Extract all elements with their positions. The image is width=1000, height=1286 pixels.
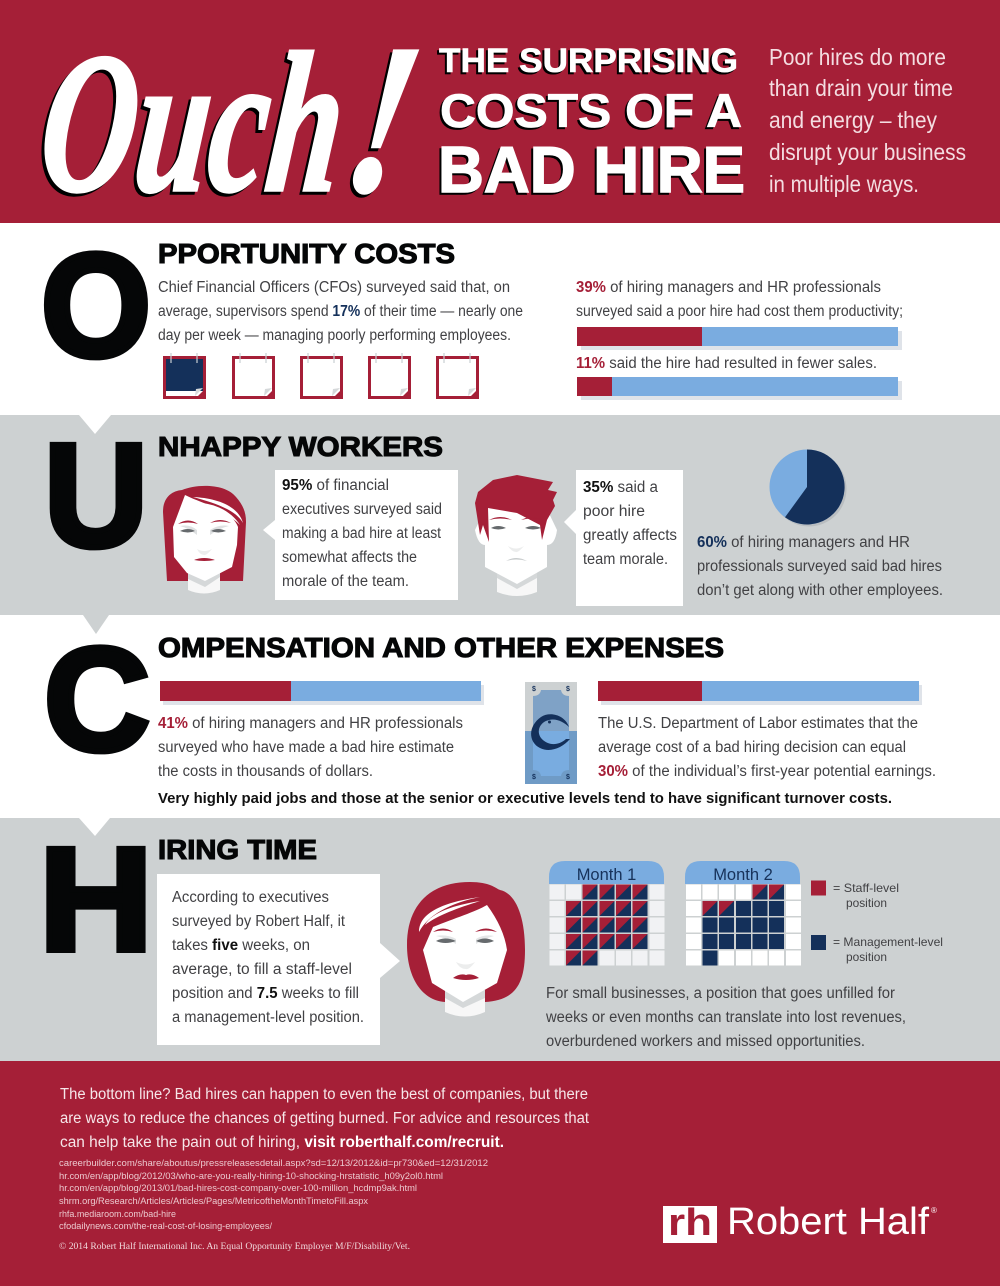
big letter U: U	[44, 414, 148, 578]
callout: weeks to fill: position and 7.5 weeks to fill	[172, 985, 359, 1002]
bar: 30 percent	[598, 681, 922, 705]
text: 41 percent: the costs in thousands of dollars.	[158, 763, 373, 780]
icon: burned dollar bill	[525, 682, 577, 784]
icon: woman face	[163, 486, 246, 594]
callout: 95 percent: morale of the team.	[282, 573, 409, 590]
chart: month 2 calendar	[685, 861, 801, 966]
logo: robert half: Robert Half	[727, 1201, 929, 1243]
intro text: than drain your time	[769, 75, 953, 101]
text: 30 percent: The U.S. Department of Labor estimates that the	[598, 715, 918, 732]
text: supervisors time: day per week — managing poorly performing employees.	[158, 327, 511, 344]
text: 30 percent	[598, 715, 936, 780]
icon: woman face large	[407, 882, 525, 1016]
legend: staff and management positions	[811, 880, 943, 964]
heading: unhappy workers: NHAPPY WORKERS	[158, 431, 443, 462]
legend: staff and management positions: position	[846, 950, 887, 964]
intro text: in multiple ways.	[769, 171, 919, 197]
text: bottom line: can help take the pain out of hiring, visit roberthalf.com/recruit.	[60, 1134, 504, 1151]
logo: robert half	[663, 1201, 937, 1244]
intro text	[769, 44, 966, 197]
chart: month 1 calendar: Month 1	[577, 866, 636, 884]
callout: 35 percent: team morale.	[583, 551, 668, 568]
icon: burned dollar bill: $	[532, 774, 536, 781]
panel: compensation and other expenses	[0, 615, 1000, 818]
heading: opportunity costs: PPORTUNITY COSTS	[158, 238, 455, 269]
text: supervisors time: Chief Financial Officers (CFOs) surveyed said that, on	[158, 279, 510, 296]
icon: five calendars	[164, 353, 479, 399]
text: bottom line: The bottom line? Bad hires can happen to even the best of companies, but there	[60, 1086, 588, 1103]
legend: staff and management positions: position	[846, 896, 887, 910]
chart: month 1 calendar	[549, 861, 664, 966]
text: small businesses: overburdened workers and missed opportunities.	[546, 1033, 865, 1050]
text: supervisors time: average, supervisors spend 17% of their time — nearly one	[158, 303, 523, 320]
callout: 35 percent: 35% said a	[583, 479, 658, 496]
big letter H: H	[39, 818, 153, 982]
logo: robert half: rh	[668, 1202, 712, 1244]
text: small businesses	[545, 985, 906, 1050]
callout: weeks to fill: takes five weeks, on	[172, 937, 310, 954]
text: 41 percent	[158, 715, 463, 780]
text: copyright: © 2014 Robert Half International Inc. An Equal Opportunity Employer M/F/Disability/Vet.	[59, 1241, 410, 1252]
callout: 95 percent: 95% of financial	[282, 477, 389, 494]
bar: 41 percent	[160, 681, 484, 705]
text: supervisors time	[158, 279, 523, 344]
text: bottom line	[60, 1086, 590, 1151]
text: sources: rhfa.mediaroom.com/bad-hire	[59, 1209, 176, 1219]
chart: month 2 calendar: Month 2	[713, 866, 773, 884]
text: 30 percent: average cost of a bad hiring decision can equal	[598, 739, 906, 756]
text: 41 percent: 41% of hiring managers and HR professionals	[158, 715, 463, 732]
text: sources: shrm.org/Research/Articles/Articles/Pages/MetricoftheMonthTimetoFill.aspx	[59, 1196, 368, 1206]
callout: weeks to fill	[157, 874, 400, 1045]
big letter O: O	[41, 224, 151, 388]
heading: hiring time: IRING TIME	[158, 834, 317, 865]
title: Ouch!: !	[332, 2, 435, 237]
text: 60 percent: 60% of hiring managers and HR	[697, 534, 910, 551]
text: turnover costs: Very highly paid jobs and those at the senior or executive levels tend to have significant turnover costs.	[158, 791, 892, 807]
callout: 95 percent: making a bad hire at least	[282, 525, 442, 542]
text: 60 percent: professionals surveyed said bad hires	[697, 558, 942, 575]
callout: weeks to fill: a management-level position.	[172, 1009, 364, 1026]
callout: 35 percent	[564, 470, 683, 606]
text: sources: hr.com/en/app/blog/2012/03/who-are-you-really-hiring-10-shocking-hrstatistic_h09y2ol0.html	[59, 1171, 443, 1181]
title: the surprising costs of a bad hire: THE SURPRISING	[439, 42, 738, 80]
text: sources: careerbuilder.com/share/aboutus/pressreleasesdetail.aspx?sd=12/13/2012&id=pr730&ed=12/31/2012	[59, 1158, 488, 1168]
panel: hiring time	[0, 818, 1000, 1061]
intro text: Poor hires do more	[769, 44, 946, 70]
callout: weeks to fill: According to executives	[172, 889, 329, 906]
text: small businesses: For small businesses, a position that goes unfilled for	[546, 985, 895, 1002]
heading: compensation: OMPENSATION AND OTHER EXPENSES	[158, 632, 724, 663]
icon: burned dollar bill: $	[532, 686, 536, 693]
callout: weeks to fill: average, to fill a staff-level	[172, 961, 352, 978]
bar: 39 percent	[577, 327, 902, 350]
pie chart: 60 percent	[770, 449, 846, 526]
icon: burned dollar bill: $	[566, 774, 570, 781]
callout: weeks to fill: surveyed by Robert Half, it	[172, 913, 346, 930]
logo: robert half: ®	[931, 1206, 937, 1215]
legend: staff and management positions: = Management-level	[833, 935, 943, 949]
title: Ouch!: Ouch	[31, 12, 355, 234]
title: the surprising costs of a bad hire: COSTS OF A	[440, 84, 742, 137]
text: 30 percent: 30% of the individual’s first-year potential earnings.	[598, 763, 936, 780]
text: small businesses: weeks or even months can translate into lost revenues,	[545, 1009, 906, 1026]
icon: man face	[475, 475, 557, 596]
panel: header	[0, 0, 1000, 237]
legend: staff and management positions: = Staff-level	[833, 881, 899, 895]
text: sources: hr.com/en/app/blog/2013/01/bad-hires-cost-company-over-100-million_hcdmp9ak.html	[59, 1183, 417, 1193]
intro text: disrupt your business	[769, 139, 966, 165]
text: 41 percent: surveyed who have made a bad hire estimate	[158, 739, 454, 756]
text: 60 percent: don’t get along with other employees.	[697, 582, 943, 599]
text: productivity: surveyed said a poor hire had cost them productivity;	[576, 303, 903, 320]
icon: burned dollar bill: $	[566, 686, 570, 693]
title: the surprising costs of a bad hire	[438, 42, 745, 206]
text: fewer sales: 11% said the hire had resulted in fewer sales.	[576, 355, 877, 372]
text: sources	[59, 1158, 488, 1231]
callout: 95 percent	[263, 470, 458, 600]
panel: unhappy workers	[0, 414, 1000, 615]
text: sources: cfodailynews.com/the-real-cost-of-losing-employees/	[59, 1221, 272, 1231]
title: the surprising costs of a bad hire: BAD HIRE	[438, 133, 745, 206]
callout: 95 percent: executives surveyed said	[282, 501, 442, 518]
callout: 35 percent: poor hire	[583, 503, 645, 520]
panel: footer	[0, 1061, 1000, 1286]
text: productivity: 39% of hiring managers and HR professionals	[576, 279, 881, 296]
intro text: and energy – they	[769, 107, 937, 133]
text: productivity	[576, 279, 903, 320]
big letter C: C	[44, 618, 150, 782]
callout: 95 percent: somewhat affects the	[282, 549, 417, 566]
text: bottom line: are ways to reduce the chances of getting burned. For advice and resources that	[60, 1110, 590, 1127]
bar: 11 percent	[577, 377, 902, 400]
panel: opportunity costs	[0, 223, 1000, 415]
text: 60 percent	[697, 534, 943, 599]
callout: 35 percent: greatly affects	[583, 527, 677, 544]
